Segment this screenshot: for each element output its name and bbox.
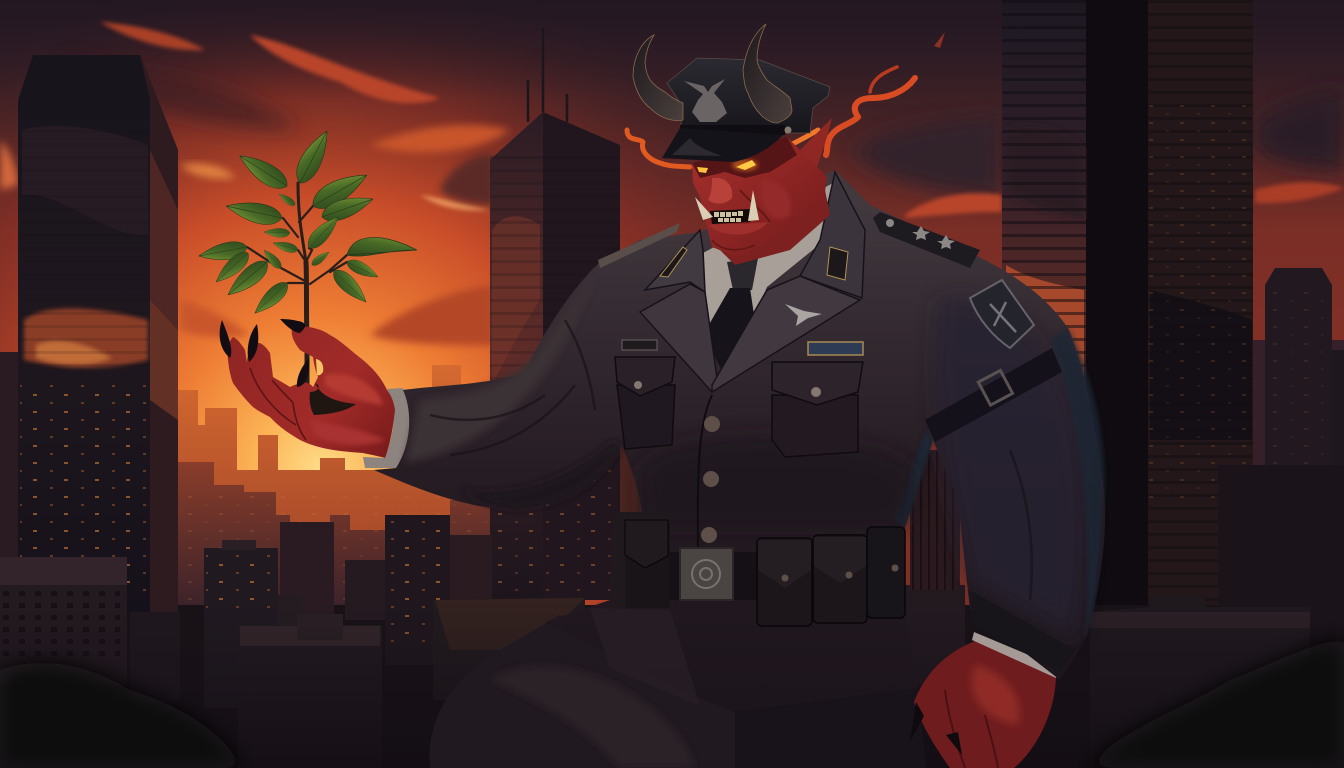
left glass tower (18, 55, 178, 612)
face (692, 137, 827, 257)
foreground rooftops (0, 450, 1310, 768)
armband (925, 348, 1062, 442)
necktie (703, 258, 758, 382)
right red hand (910, 640, 1056, 768)
glowing eyes (697, 159, 758, 173)
neck (720, 190, 830, 265)
far right buildings (1218, 268, 1344, 635)
seedling (197, 126, 417, 392)
placket and buttons (698, 395, 720, 560)
trousers (430, 615, 926, 768)
sleeve shading (405, 275, 1105, 672)
flames (627, 67, 915, 167)
chest pockets (615, 357, 863, 457)
cap badge (684, 79, 727, 122)
finger creases and palm light (250, 368, 385, 445)
red clawed hand holding soil (220, 319, 395, 458)
seedling soil (310, 383, 356, 415)
gap between thumb and stem (316, 359, 323, 375)
ear (797, 118, 832, 177)
central tower with antennas (490, 28, 620, 600)
lapels and collar (640, 172, 865, 392)
shirt collar (700, 183, 833, 340)
distant skyline (0, 352, 660, 620)
belt with pouches (612, 512, 905, 626)
officer cap (662, 58, 830, 162)
tusks (695, 190, 759, 221)
clouds (0, 22, 1344, 345)
shirt cuffs (363, 388, 1060, 678)
dark ground behind the rooftops (0, 605, 1344, 768)
epaulettes (598, 212, 980, 268)
demon head (627, 24, 915, 265)
horns (633, 24, 792, 123)
mouth and teeth (708, 209, 768, 250)
claws (220, 319, 309, 387)
jacket skirt (590, 608, 700, 706)
brow shadow (692, 137, 797, 178)
demon officer figure (363, 24, 1105, 768)
jacket body and sleeves (374, 170, 1105, 712)
low fog and dark foliage (0, 600, 1344, 768)
leaves (197, 126, 417, 319)
right glass tower (1002, 0, 1253, 605)
stem and branches (247, 183, 347, 392)
nose and cheek modelling (708, 178, 791, 222)
name tag and ribbon (622, 340, 863, 355)
shoulder patch (970, 280, 1034, 348)
